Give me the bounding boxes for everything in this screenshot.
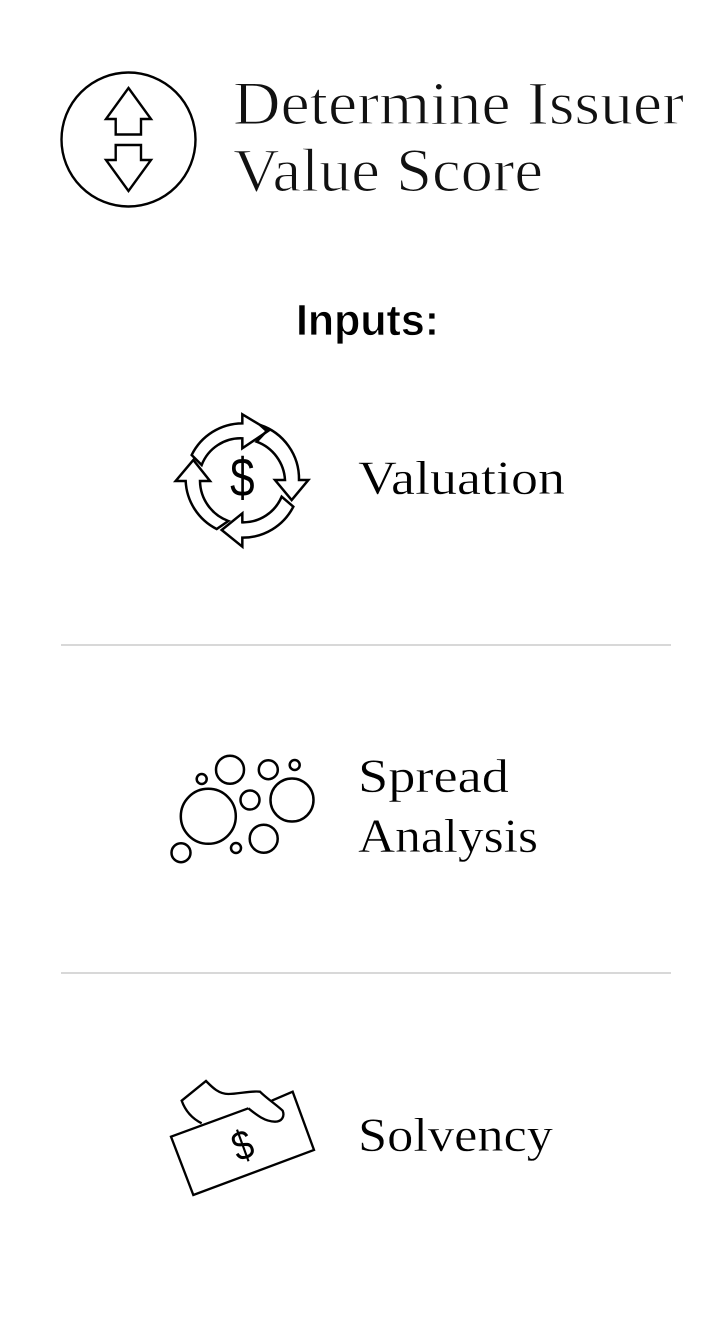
label: spread analysis: Analysis bbox=[358, 810, 538, 863]
icon: up and down arrows in circle bbox=[62, 72, 196, 206]
label: spread analysis: Spread bbox=[358, 750, 509, 803]
label: spread analysis bbox=[358, 750, 538, 863]
icon: hand holding dollar bill bbox=[171, 1081, 314, 1195]
label: solvency: Solvency bbox=[358, 1109, 553, 1162]
icon: dollar with circular arrows: $ bbox=[230, 447, 255, 509]
heading: inputs: Inputs: bbox=[296, 296, 439, 345]
divider bbox=[61, 972, 671, 974]
title: Determine Issuer bbox=[233, 71, 684, 138]
icon: dollar with circular arrows bbox=[176, 414, 308, 547]
divider bbox=[61, 644, 671, 646]
icon: hand holding dollar bill: $ bbox=[226, 1121, 260, 1171]
icon: bubbles bbox=[172, 756, 314, 862]
title: Value Score bbox=[233, 138, 543, 205]
title bbox=[233, 71, 684, 205]
label: valuation: Valuation bbox=[358, 452, 565, 505]
